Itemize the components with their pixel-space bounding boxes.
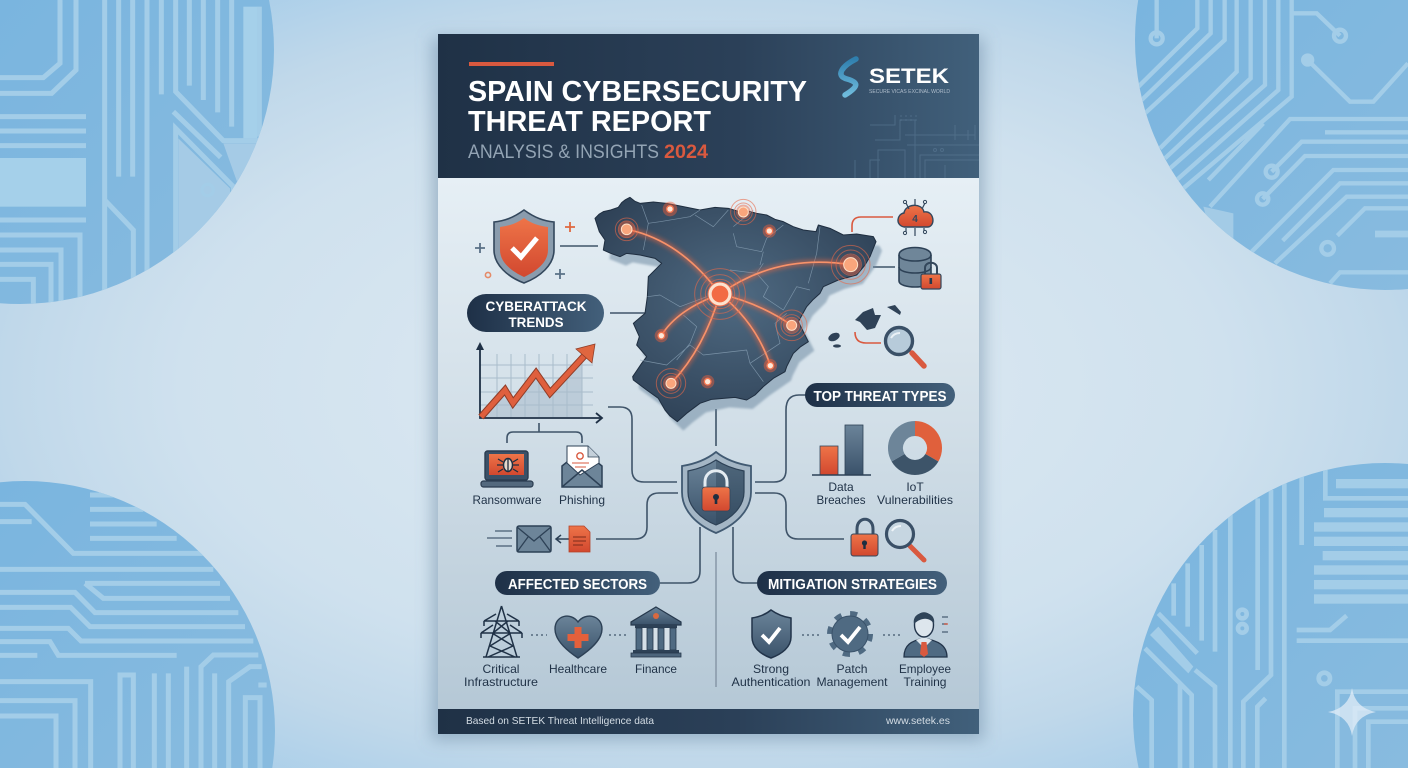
icon: lock [851,519,878,556]
subtitle: ANALYSIS & INSIGHTS [468,142,659,163]
background circuit disc: top right [1134,0,1408,291]
pill: top threat types [805,383,955,407]
bar chart: data breaches [812,425,871,475]
pill: affected sectors [495,571,660,595]
accent bar [469,62,554,66]
connector lines [507,217,895,687]
label: healthcare: Healthcare [549,662,607,676]
label: employee training: Employee [899,662,951,676]
chart: trend line [476,342,602,423]
title: SPAIN CYBERSECURITY [468,76,807,108]
pill: top threat types: TOP THREAT TYPES [814,389,947,405]
label: ransomware: Ransomware [472,493,542,507]
map shadow [601,206,882,431]
label: finance: Finance [635,662,677,676]
icon: magnifier [886,520,924,560]
poster [438,34,979,734]
poster shadow [432,38,984,740]
background circuit disc: top left [0,0,275,305]
icon: database with lock [899,248,941,289]
label: patch management: Management [816,675,888,689]
icon: cloud [898,199,933,236]
label: patch management: Patch [836,662,868,676]
icon: magnifier over islands [886,328,924,366]
label: phishing: Phishing [559,493,605,507]
icon: central shield with lock [682,452,751,533]
label: strong authentication: Strong [753,662,789,676]
subtitle: 2024 [664,142,708,163]
icon: finance bank [631,607,681,657]
label: data breaches: Breaches [816,493,866,507]
icon: healthcare heart [555,616,602,658]
panel: header [438,34,979,178]
pill: cyberattack trends [467,294,604,332]
icon: phishing email [562,446,602,487]
icon: ransomware laptop [481,451,533,487]
footer: www.setek.es [885,715,950,727]
label: critical infrastructure: Critical [482,662,520,676]
label: strong authentication: Authentication [732,675,810,689]
icon: sparkle [1328,688,1376,736]
icon: power pylon [481,606,522,657]
threat nodes [615,199,870,398]
pill: cyberattack trends: CYBERATTACK [486,299,587,314]
footer: Based on SETEK Threat Intelligence data [466,715,654,727]
icon: Balearic islands [827,305,901,348]
label: data breaches: Data [828,480,854,494]
logo: SETEK [869,65,949,88]
label: employee training: Training [904,675,946,689]
pill: mitigation strategies [757,571,947,595]
icon: shield with check [475,210,575,283]
label: IoT vulnerabilities: Vulnerabilities [877,493,953,507]
background circuit disc: bottom left [0,480,276,768]
logo: SECURE VICAS EXCINAL WORLD [869,89,950,95]
pill: mitigation strategies: MITIGATION STRATEGIES [768,577,937,593]
donut chart: IoT vulnerabilities [888,421,942,475]
icon: patch gear [830,614,870,654]
background circuit disc: bottom right [1132,462,1408,768]
icon: cloud: 4 [912,214,918,225]
region borders [640,205,820,382]
pill: cyberattack trends: TRENDS [508,315,564,330]
logo [841,59,950,95]
attack arcs [627,229,851,383]
icon: email send row [487,526,590,552]
attack arcs glow [627,229,851,383]
map of Spain [595,197,876,422]
title [468,76,807,138]
pill: affected sectors: AFFECTED SECTORS [508,577,647,593]
label: critical infrastructure: Infrastructure [464,675,538,689]
icon: authentication shield [752,610,791,658]
header circuit pattern [855,115,979,178]
poster body [438,178,979,710]
label: IoT vulnerabilities: IoT [906,480,924,494]
title: THREAT REPORT [468,106,712,138]
footer [438,709,979,734]
icon: employee [904,613,948,657]
dotted connectors [531,634,900,636]
